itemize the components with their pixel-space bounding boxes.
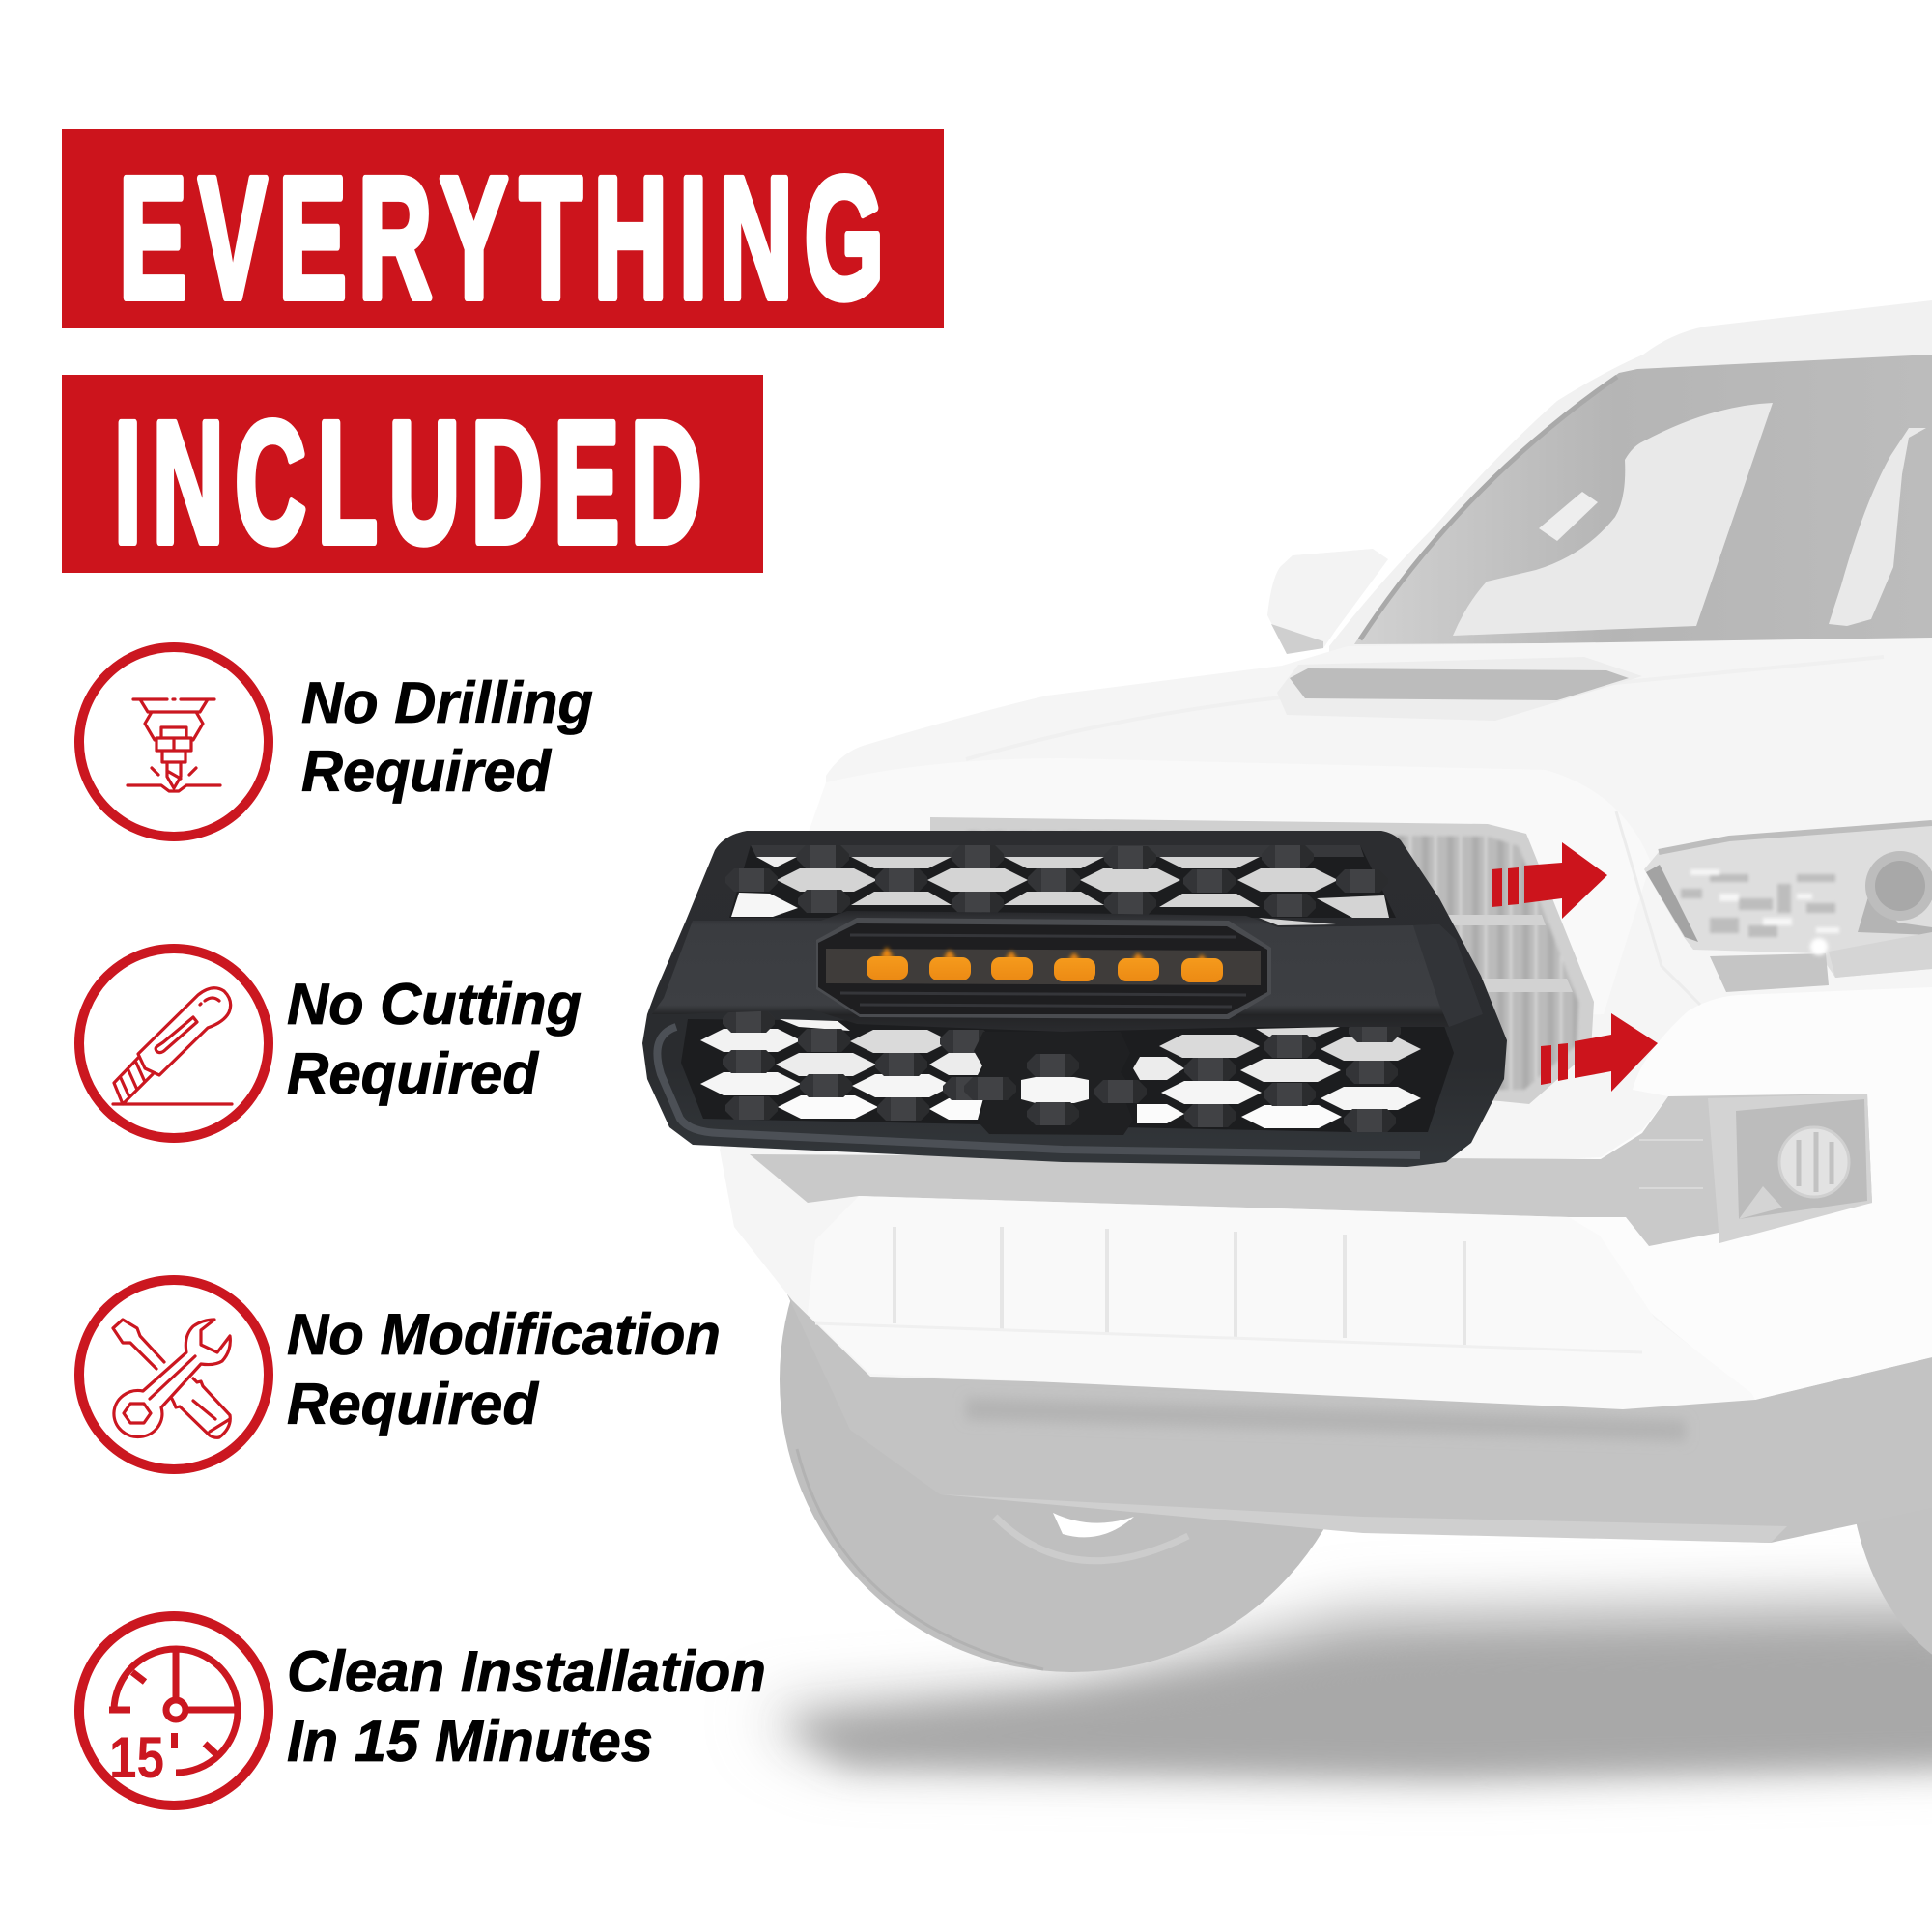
- headlight lower band: [1710, 953, 1829, 992]
- white bumper panel: [808, 1196, 1755, 1409]
- side mirror: [1267, 549, 1388, 654]
- feature: no drilling: Required: [301, 739, 552, 804]
- windshield reflection left: [1453, 403, 1773, 636]
- upper mesh backing: [729, 845, 1396, 918]
- product: LED grille: [642, 831, 1507, 1167]
- truck body: [720, 638, 1932, 1400]
- upper mesh openings: [731, 857, 1389, 925]
- lower intake: [750, 1094, 1872, 1246]
- title banner: EVERYTHING: [62, 129, 944, 334]
- label: No Modification: [287, 1302, 721, 1367]
- arrow upper: [1492, 842, 1607, 919]
- upper mesh strip: [751, 845, 1364, 857]
- lower mesh openings: [700, 1019, 1421, 1128]
- icon: utility knife: [79, 949, 269, 1138]
- feature: no cutting: Required: [287, 1041, 539, 1106]
- front right wheel: [1848, 1217, 1932, 1681]
- title banner: EVERYTHING: EVERYTHING: [119, 141, 895, 334]
- icon: wrench and screwdriver: [79, 1280, 269, 1469]
- feature: no modification: Required: [287, 1372, 539, 1436]
- feature: no drilling: [79, 647, 593, 837]
- icon: drill: [79, 647, 269, 837]
- title banner: INCLUDED: INCLUDED: [114, 385, 713, 579]
- feature: clean installation: In 15 Minutes: [287, 1709, 653, 1774]
- light bar housing: [816, 918, 1271, 1019]
- a-pillar line: [1360, 377, 1617, 639]
- truck photo, faded: [720, 300, 1932, 1776]
- icon: 15 minute clock: 15: [109, 1725, 164, 1790]
- frame lighter band: [657, 1027, 1420, 1155]
- center tow tile: [964, 1032, 1147, 1135]
- cab roof: [1329, 300, 1932, 657]
- center bar: [652, 911, 1483, 1032]
- ground shadow: [758, 1604, 1932, 1776]
- factory grille behind: [930, 817, 1594, 1104]
- icon: 15 minute clock: [79, 1616, 269, 1805]
- hood scoop: [1277, 657, 1642, 721]
- windshield reflection right: [1829, 428, 1926, 626]
- lower fender: [1488, 987, 1932, 1400]
- fog lamp housing: [1639, 1094, 1872, 1243]
- mesh nodes: [723, 845, 1401, 1132]
- label: No Cutting: [287, 972, 582, 1037]
- label: Clean Installation: [287, 1639, 766, 1704]
- sparkle: [1810, 938, 1828, 955]
- amber LEDs: [867, 947, 1223, 982]
- feature: no modification: [79, 1280, 721, 1469]
- title banner: INCLUDED: [62, 375, 763, 579]
- arrow lower: [1541, 1013, 1658, 1092]
- lower bumper: [787, 1294, 1932, 1543]
- windshield: [1354, 355, 1932, 644]
- feature: no cutting: [79, 949, 582, 1138]
- feature: clean installation: [79, 1616, 766, 1805]
- grille frame: [642, 831, 1507, 1167]
- bar face right highlight: [1413, 924, 1483, 1027]
- label: No Drilling: [301, 670, 593, 735]
- lower mesh backing: [681, 1019, 1454, 1132]
- front left wheel: [780, 1087, 1365, 1672]
- headlight: [1644, 821, 1932, 992]
- rearview mirror: [1539, 492, 1598, 541]
- red arrows pointing at the grille: [1492, 842, 1658, 1092]
